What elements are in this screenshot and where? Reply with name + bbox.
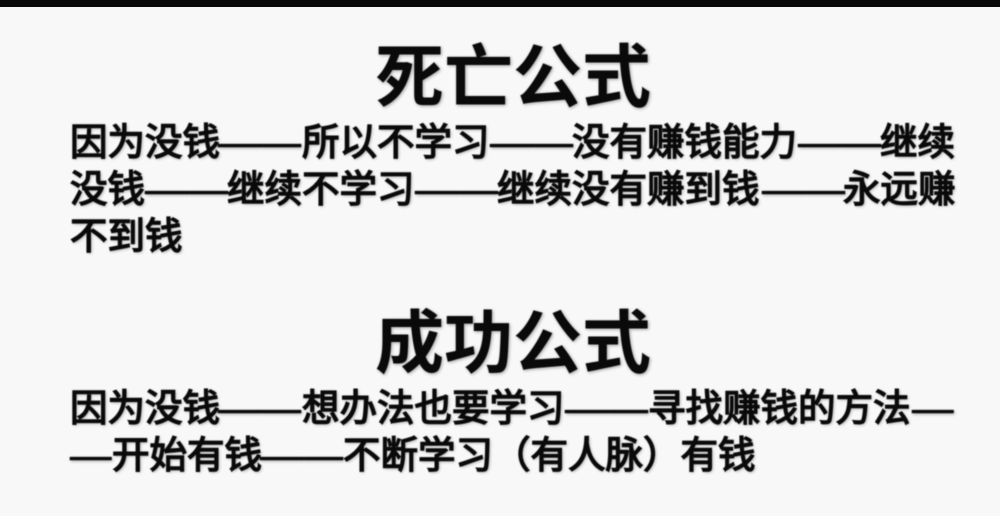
heading: death formula: 死亡公式: [375, 39, 651, 116]
text line 3: 不到钱: [70, 215, 182, 257]
text line 1: ——: [490, 118, 573, 165]
text line 1: 所以不学习: [302, 121, 490, 163]
text line 2: ——: [762, 165, 845, 212]
text line 2: [68, 431, 757, 478]
text line 1: [70, 384, 956, 431]
text line 1: —: [912, 384, 954, 431]
text line 1: [70, 118, 956, 165]
text line 2: 不断学习（有人脉）有钱: [343, 434, 756, 476]
text line 1: ——: [798, 118, 881, 165]
text line 2: 开始有钱: [112, 434, 262, 476]
text line 2: ——: [415, 165, 498, 212]
text line 2: [70, 165, 956, 212]
text line 1: 继续: [880, 121, 955, 163]
heading: success formula: 成功公式: [375, 305, 651, 382]
panel: death formula: [70, 39, 956, 257]
text line 2: ——: [145, 165, 228, 212]
text line 1: 因为没钱: [70, 121, 220, 163]
text line 1: ——: [218, 118, 301, 165]
panel: success formula: [68, 305, 956, 478]
text line 2: ——: [260, 431, 343, 478]
text line 1: 寻找赚钱的方法: [648, 387, 910, 429]
text line 2: 没钱: [70, 168, 145, 210]
text line 2: 永远赚: [843, 168, 956, 210]
text line 2: 继续不学习: [227, 168, 414, 210]
text line 2: —: [70, 431, 112, 478]
text line 1: 没有赚钱能力: [572, 121, 797, 163]
text line 1: 想办法也要学习: [302, 387, 564, 429]
text line 1: ——: [218, 384, 301, 431]
top black bar: [0, 0, 1000, 7]
text line 2: 继续没有赚到钱: [497, 168, 760, 210]
text line 1: 因为没钱: [70, 387, 220, 429]
text line 1: ——: [565, 384, 648, 431]
